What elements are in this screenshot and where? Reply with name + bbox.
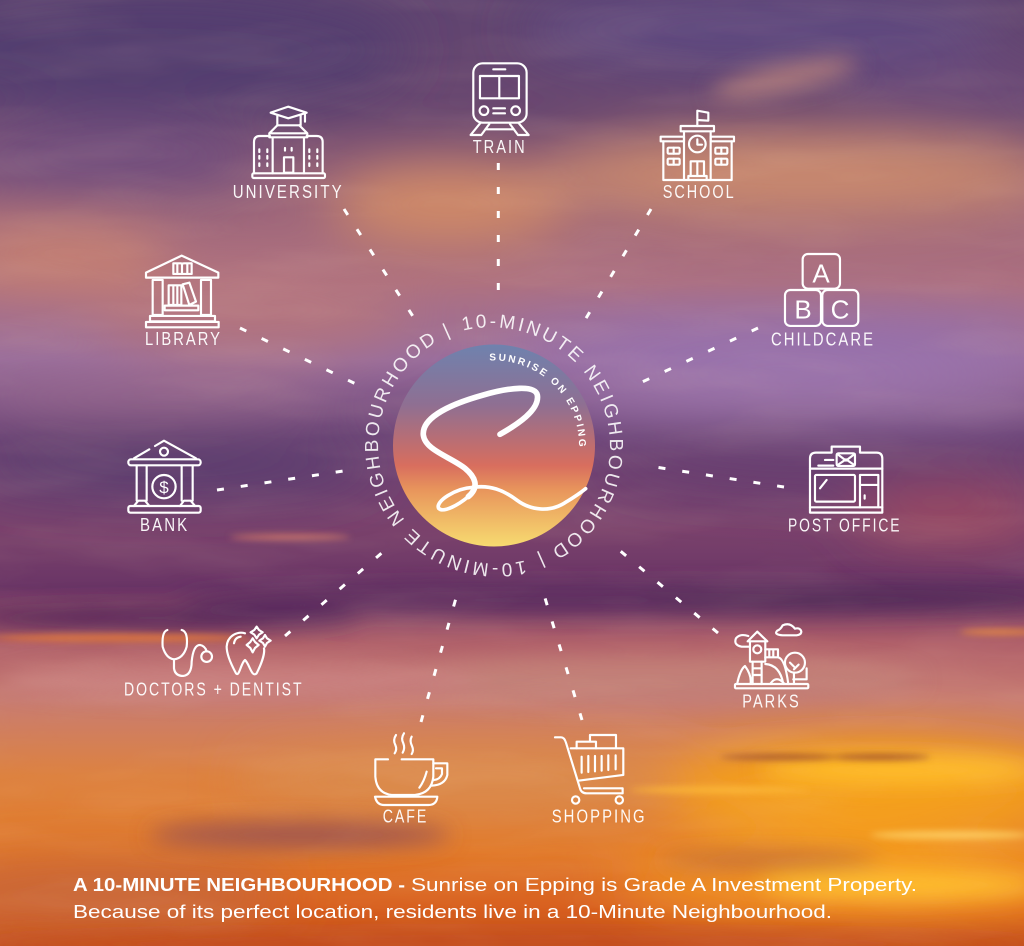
centre logo [365, 314, 623, 576]
brand text: SUNRISE ON EPPING [490, 354, 586, 446]
logo disc [393, 344, 595, 546]
label: shopping: SHOPPING [552, 807, 647, 827]
label: school: SCHOOL [663, 182, 736, 202]
dashed connector lines [217, 163, 784, 722]
icon: childcare blocks: A [812, 258, 830, 288]
icon: bank [128, 441, 201, 535]
ring text: 10-MINUTE NEIGHBOURHOOD | [462, 314, 623, 568]
script S monogram [423, 388, 586, 510]
icon: bank: $ [159, 478, 169, 497]
label: train: TRAIN [473, 137, 527, 157]
icon: school [661, 111, 736, 202]
caption [73, 875, 917, 922]
icon: shopping trolley [552, 735, 647, 827]
ring text [365, 314, 623, 576]
label: university: UNIVERSITY [233, 182, 344, 202]
stethoscope [163, 630, 207, 676]
icon: childcare blocks: C [831, 294, 849, 324]
label: cafe: CAFE [383, 807, 428, 827]
label: library: LIBRARY [145, 329, 222, 349]
icon: coffee cup [375, 733, 447, 827]
icon: university [233, 107, 344, 202]
label: doctors + dentist: DOCTORS + DENTIST [124, 680, 304, 700]
label: bank: BANK [140, 515, 189, 535]
ring text: 10-MINUTE NEIGHBOURHOOD | [365, 323, 526, 576]
caption second sentence: Because of its perfect location, residents live in a 10-Minute Neighbourhood. [73, 902, 832, 922]
caption first sentence: Sunrise on Epping is Grade A Investment Property. [411, 875, 917, 895]
label: parks: PARKS [742, 691, 801, 711]
icon: post office [788, 447, 902, 536]
icon: childcare blocks [771, 254, 875, 350]
icon: playground [735, 624, 808, 711]
label: post office: POST OFFICE [788, 516, 902, 536]
tooth [227, 633, 264, 674]
label: childcare: CHILDCARE [771, 330, 875, 350]
icon: childcare blocks: B [794, 294, 812, 324]
icon: stethoscope and tooth [124, 627, 304, 700]
sparkles [247, 627, 271, 652]
icon: train [471, 63, 529, 157]
icon: library [145, 256, 222, 349]
caption heading: A 10-MINUTE NEIGHBOURHOOD - [73, 875, 405, 895]
